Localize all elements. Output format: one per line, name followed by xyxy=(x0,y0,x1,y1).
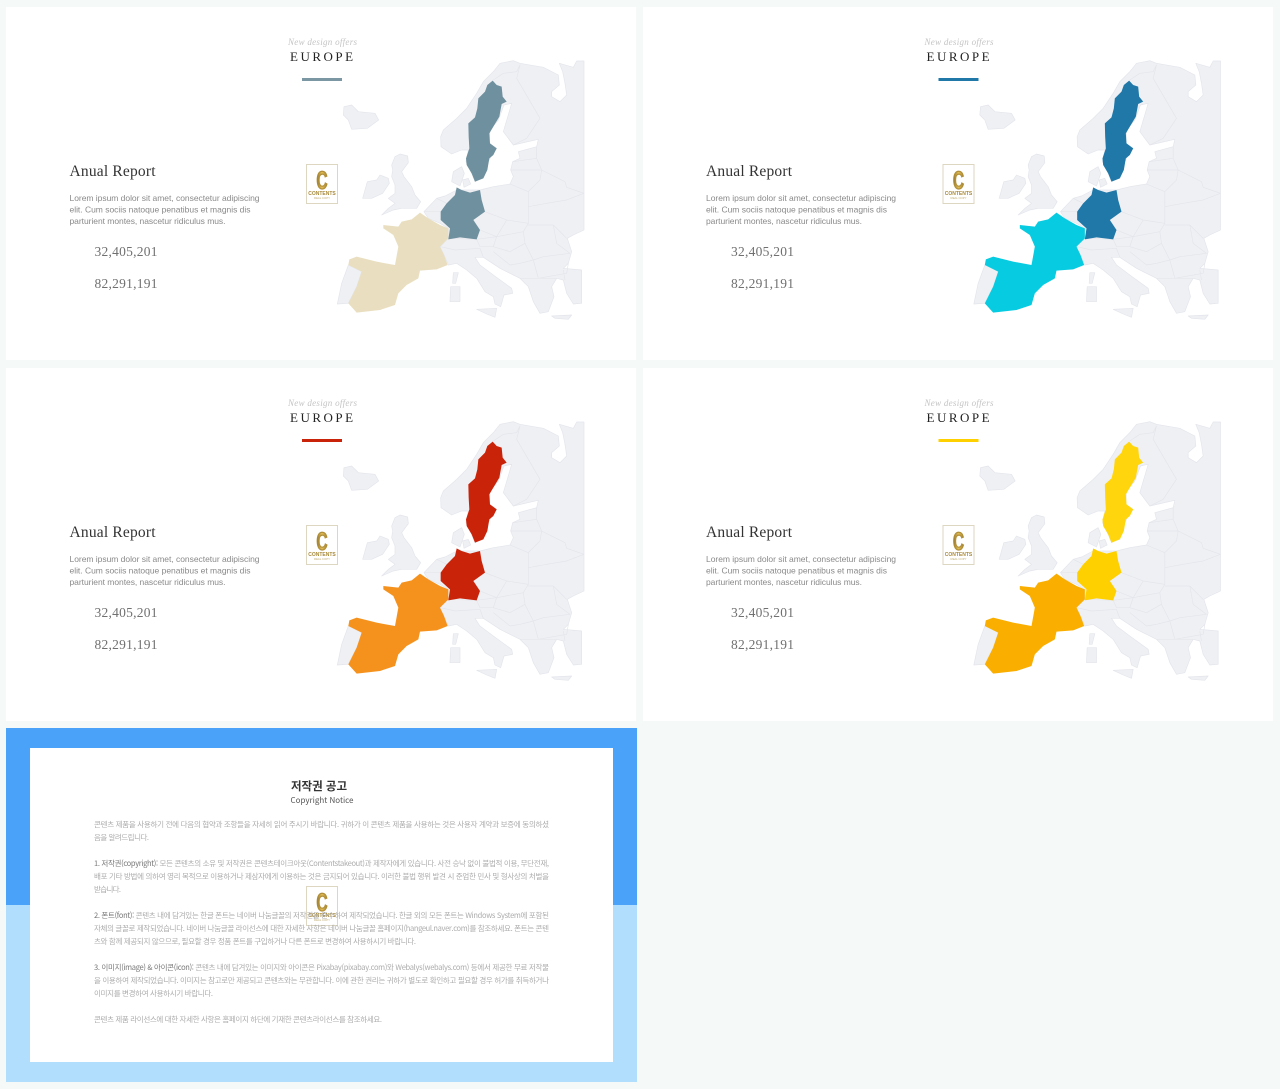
text block: notice body: 을 이용하여 제작되었습니다. 이미지는 참고로만 제공되고 콘텐츠와는 무관합니다. 이에 관한 권리는 귀하가 별도로 확인하고 필요할 경우 허가를 취득하거나 xyxy=(94,975,549,986)
heading: copyright notice: Copyright Notice xyxy=(290,795,354,806)
text block: notice body: 배포 기타 방법에 의하여 영리 목적으로 이용하거나 제삼자에게 이용하는 것은 금지되어 있습니다. 이러한 불법 행위 발견 시 준엄한 민사 및 형사상의 처벌을 xyxy=(94,871,549,882)
text block: notice body xyxy=(94,819,549,1025)
icon: contents logo xyxy=(306,886,338,926)
text block: notice body: 콘텐츠 제품 라이선스에 대한 자세한 사항은 홈페이지 하단에 기재한 콘텐츠라이선스를 참조하세요. xyxy=(94,1014,382,1025)
panel: copyright notice xyxy=(6,728,637,1082)
text block: notice body: 콘텐츠 제품을 사용하기 전에 다음의 협약과 조항들을 자세히 읽어 주시기 바랍니다. 귀하가 이 콘텐츠 제품을 사용하는 것은 사용자 계약과 보증에 동의하셨 xyxy=(94,819,549,830)
panel: Europe red and orange xyxy=(6,368,636,721)
text block: notice body: 츠와 함께 제공되지 않으므로, 필요할 경우 정품 폰트를 구입하거나 다른 폰트로 변경하여 사용하시기 바랍니다. xyxy=(94,936,416,947)
panel: Europe slate and sand xyxy=(6,7,636,360)
text block: notice body: 2. 폰트(font): 콘텐츠 내에 담겨있는 한글 폰트는 네이버 나눔글꼴의 저작권을 준수하여 제작되었습니다. 한글 외의 모든 폰트는 Windows System에 포함된 xyxy=(94,910,549,921)
text block: notice body: 1. 저작권(copyright): 모든 콘텐츠의 소유 및 저작권은 콘텐츠테이크아웃(Contentstakeout)과 제작자에게 있습니다. 사전 승낙 없이 불법적 이용, 무단전재, xyxy=(94,858,549,869)
panel: Europe yellow and amber xyxy=(643,368,1273,721)
text block: notice body: 음을 알려드립니다. xyxy=(94,832,149,843)
heading: copyright notice xyxy=(290,778,354,806)
text block: notice body: 3. 이미지(image) & 아이콘(icon): 콘텐츠 내에 담겨있는 이미지와 아이콘은 Pixabay(pixabay.com)와 Webalys(webalys.com) 등에서 제공한 무료 저작물 xyxy=(94,962,549,973)
panel: Europe blue and cyan xyxy=(643,7,1273,360)
text block: notice body: 자체의 글꼴로 제작되었습니다. 네이버 나눔글꼴 라이선스에 대한 자세한 사항은 네이버 나눔글꼴 홈페이지(hangeul.naver.com)를 참조하세요. 폰트는 콘텐 xyxy=(94,923,549,934)
heading: copyright notice: 저작권 공고 xyxy=(291,778,347,794)
text block: notice body: 받습니다. xyxy=(94,884,121,895)
text block: notice body: 이미지를 변경하여 사용하시기 바랍니다. xyxy=(94,988,213,999)
